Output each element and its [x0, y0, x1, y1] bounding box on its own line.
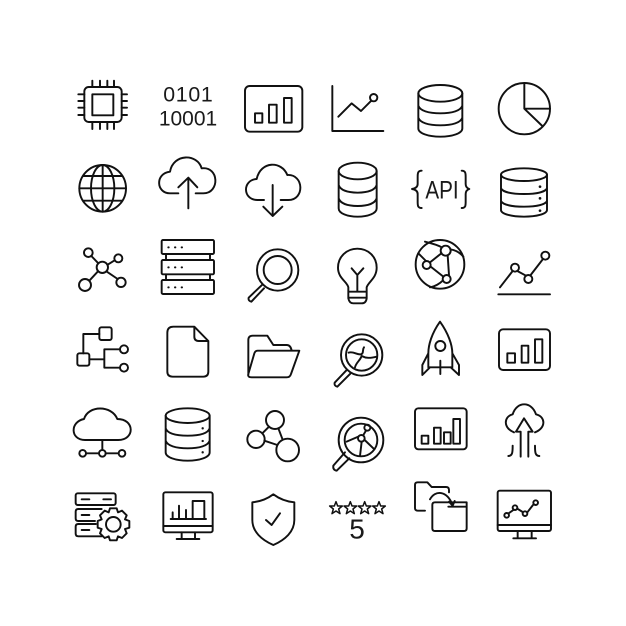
icon: monitor with line chart — [498, 491, 551, 538]
icon: trend line — [498, 252, 550, 294]
icon: pie chart — [499, 83, 550, 134]
icon: open folder — [248, 336, 299, 377]
icon: network globe — [416, 240, 464, 289]
icon: document — [167, 327, 208, 377]
icon: binary digits — [159, 82, 217, 131]
icon: API braces — [412, 171, 469, 208]
icon: network nodes — [79, 248, 126, 291]
icon: server rack — [162, 240, 214, 294]
icon: server settings gear — [76, 493, 129, 540]
icon: five star rating — [330, 502, 385, 544]
icon: five star rating: 5 — [349, 513, 365, 544]
icon: database with lights — [166, 408, 210, 461]
icon: cloud download — [246, 165, 300, 216]
icon: rocket — [422, 322, 459, 375]
icon: cloud upload — [159, 157, 215, 208]
icon: connected circles — [247, 411, 299, 461]
icon: database with lights — [501, 168, 547, 217]
icon: bar chart panel — [245, 86, 302, 132]
icon: bar chart panel — [499, 329, 550, 370]
icon: cloud tree arrow — [506, 404, 543, 457]
icon: monitor with bars — [163, 492, 213, 539]
icon: bar chart panel — [415, 408, 467, 449]
icon: magnifier with map — [335, 334, 382, 387]
icon: line chart — [332, 86, 383, 131]
rows 3 and 4 — [77, 240, 550, 387]
icon: magnifier with chart — [333, 418, 383, 471]
icon: folder transfer — [415, 482, 467, 531]
icon: globe — [79, 165, 126, 212]
icon: binary digits: 0101 — [163, 82, 213, 106]
icon: magnifier — [249, 249, 298, 302]
icon: cloud network — [74, 408, 131, 457]
icon: database — [339, 163, 377, 217]
icon: binary digits: 10001 — [159, 108, 217, 131]
icon: light bulb — [338, 249, 377, 303]
icon: flow diagram — [77, 327, 128, 372]
icon: database — [418, 85, 462, 137]
icon: shield check — [252, 494, 294, 545]
icon: cpu chip — [78, 81, 127, 129]
icon: API braces: API — [425, 177, 459, 205]
rows 1 and 2 — [78, 81, 550, 217]
rows 5 and 6 — [74, 404, 551, 545]
